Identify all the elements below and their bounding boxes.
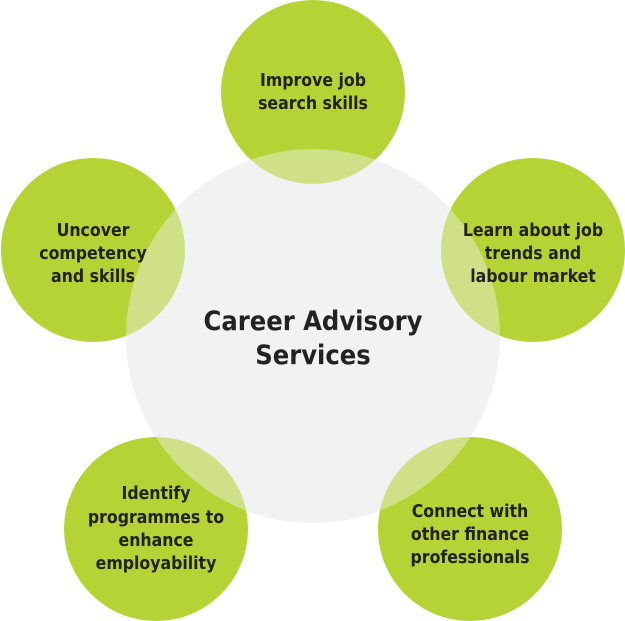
circle: connect with professionals bbox=[378, 437, 562, 621]
label: learn about job trends: trends and bbox=[485, 244, 581, 264]
label: uncover competency bbox=[39, 221, 147, 287]
central circle base bbox=[126, 149, 500, 523]
circle: learn about job trends bbox=[441, 158, 625, 342]
label: identify programmes: employability bbox=[96, 554, 216, 574]
label: learn about job trends: Learn about job bbox=[463, 221, 603, 241]
title: Services bbox=[255, 340, 371, 371]
label: identify programmes bbox=[88, 484, 224, 574]
label: connect with professionals: professionals bbox=[411, 548, 529, 568]
title: Career Advisory bbox=[204, 306, 423, 337]
label: identify programmes: programmes to bbox=[88, 508, 224, 528]
label: uncover competency: and skills bbox=[51, 267, 135, 287]
title bbox=[204, 306, 423, 371]
circle: improve job search skills bbox=[221, 0, 405, 184]
label: improve job search skills bbox=[258, 71, 368, 114]
label: uncover competency: competency bbox=[39, 244, 147, 264]
label: identify programmes: enhance bbox=[119, 531, 193, 551]
label: identify programmes: Identify bbox=[121, 484, 191, 504]
circle: identify programmes bbox=[64, 437, 248, 621]
label: connect with professionals bbox=[411, 502, 529, 568]
label: learn about job trends: labour market bbox=[470, 267, 596, 287]
circle: uncover competency bbox=[1, 158, 185, 342]
label: learn about job trends bbox=[463, 221, 603, 287]
label: improve job search skills: search skills bbox=[258, 94, 368, 114]
label: improve job search skills: Improve job bbox=[260, 71, 366, 91]
label: connect with professionals: Connect with bbox=[412, 502, 528, 522]
label: uncover competency: Uncover bbox=[57, 221, 130, 241]
label: connect with professionals: other finance bbox=[411, 525, 529, 545]
central circle overlay bbox=[126, 149, 500, 523]
